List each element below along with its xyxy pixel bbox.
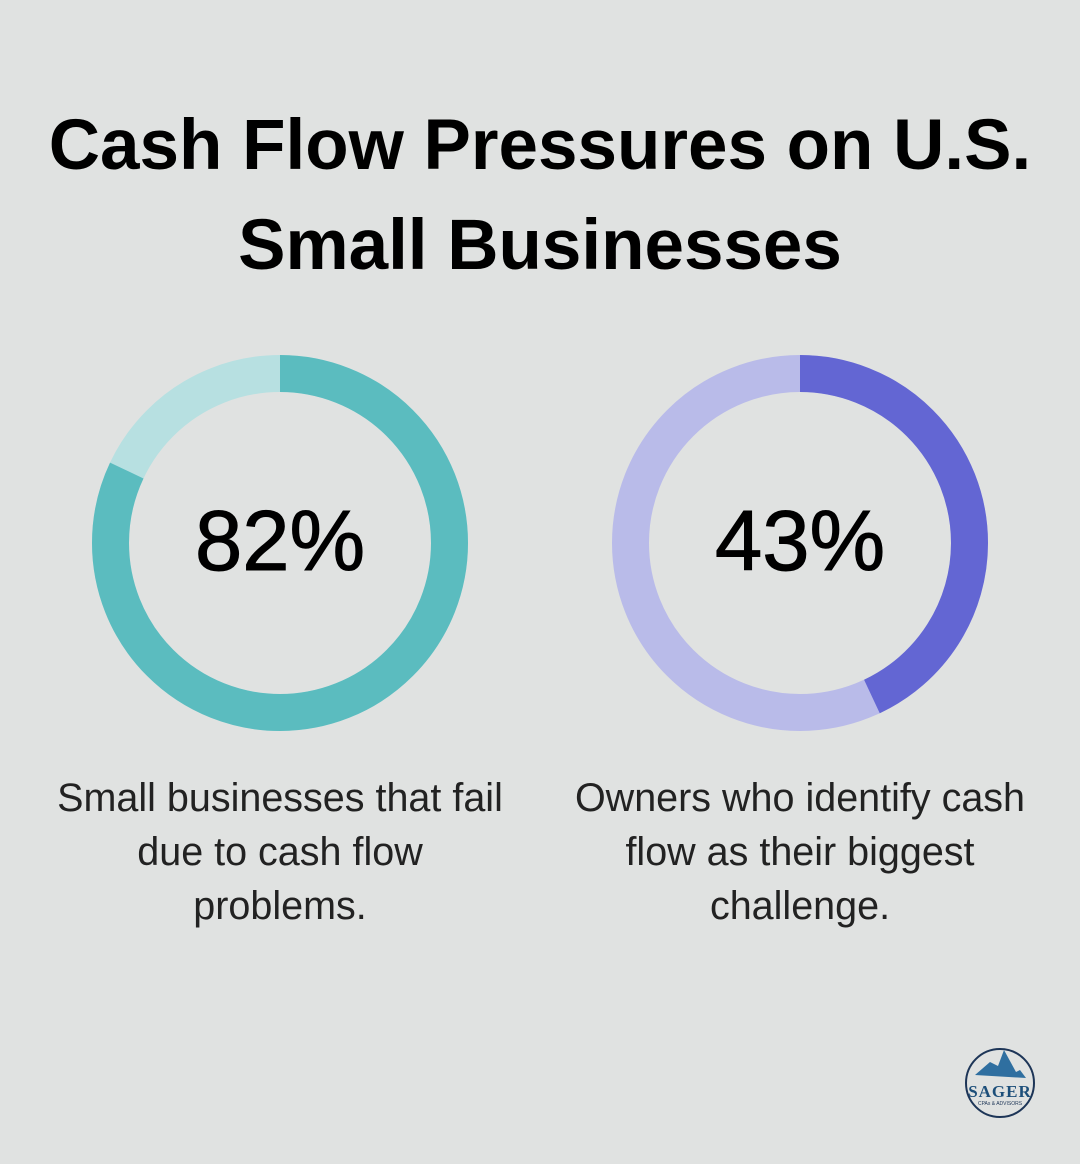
logo [966,1049,1034,1117]
logo: CPAs & ADVISORS [978,1101,1023,1107]
donut: 43%: 43% [715,494,885,589]
title [49,106,1031,285]
title: Small Businesses [238,206,842,285]
donut: 82%: 82% [195,494,365,589]
donut: 82% [110,374,450,712]
logo: SAGER [968,1082,1032,1101]
title: Cash Flow Pressures on U.S. [49,106,1031,185]
label: 82%: Small businesses that fail due to cash flow problems. [57,776,503,928]
donut: 43% [630,374,970,712]
label: 43%: Owners who identify cash flow as their biggest challenge. [575,776,1025,928]
